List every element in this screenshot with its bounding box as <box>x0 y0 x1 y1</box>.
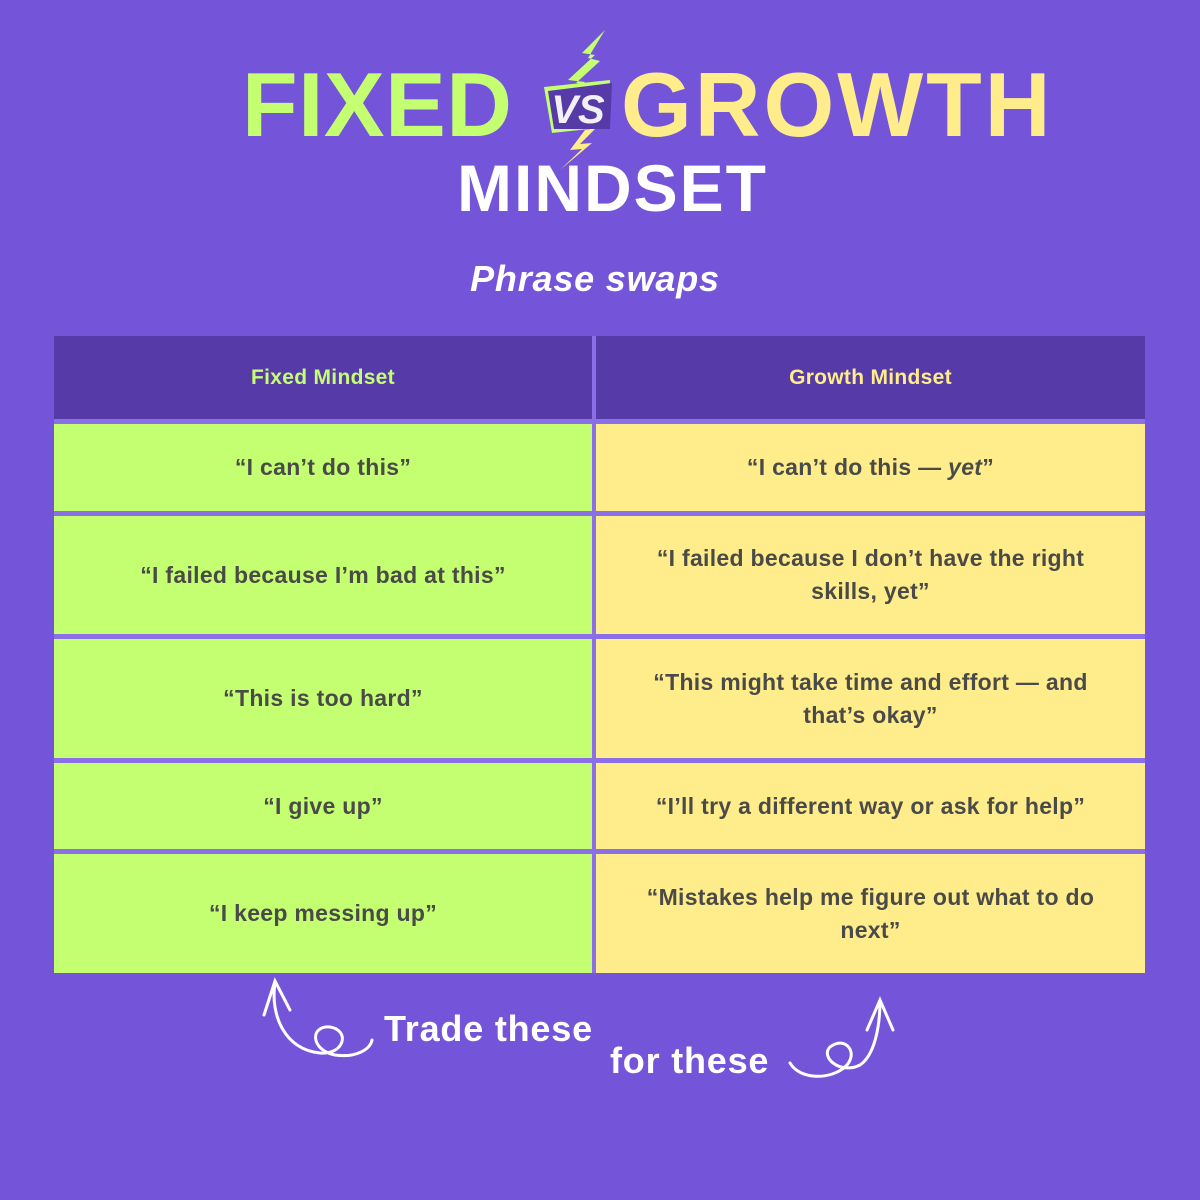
row 1 growth <box>596 424 1145 511</box>
row 1 growth: “I can’t do this — ” <box>747 454 994 480</box>
row 3 fixed <box>54 639 592 758</box>
row 2 growth <box>596 516 1145 634</box>
row 4 growth <box>596 763 1145 849</box>
row 3 growth <box>596 639 1145 758</box>
row 3 growth: that’s okay” <box>803 702 938 728</box>
icon: vs lightning <box>544 30 612 170</box>
row 2 fixed <box>54 516 592 634</box>
row 2 growth: “I failed because I don’t have the right <box>657 545 1084 571</box>
row 1 fixed: “I can’t do this” <box>235 454 411 480</box>
text: for these: for these <box>610 1040 769 1081</box>
row 5 growth: “Mistakes help me figure out what to do <box>647 884 1094 910</box>
table <box>54 336 1145 973</box>
icon: vs lightning: VS <box>551 88 605 132</box>
row 4 fixed <box>54 763 592 849</box>
arrow: right curly <box>788 996 894 1078</box>
row 5 growth <box>596 854 1145 973</box>
title: FIXED: FIXED <box>242 55 512 156</box>
row 5 fixed <box>54 854 592 973</box>
header: Growth Mindset <box>596 336 1145 419</box>
header: Fixed Mindset: Fixed Mindset <box>251 366 395 389</box>
arrow: left curly <box>262 977 374 1058</box>
row 1 growth: yet <box>948 454 982 480</box>
row 4 growth: “I’ll try a different way or ask for help” <box>656 792 1085 818</box>
row 1 fixed <box>54 424 592 511</box>
row 5 growth: next” <box>840 916 901 942</box>
row 4 fixed: “I give up” <box>263 792 383 818</box>
header: Growth Mindset: Growth Mindset <box>789 366 952 389</box>
text: Trade these: Trade these <box>384 1008 593 1049</box>
title: GROWTH: GROWTH <box>621 55 1053 156</box>
row 5 fixed: “I keep messing up” <box>209 900 437 926</box>
row 3 growth: “This might take time and effort — and <box>653 668 1088 694</box>
row 3 fixed: “This is too hard” <box>223 685 423 711</box>
subtitle: Phrase swaps <box>470 258 720 299</box>
header: Fixed Mindset <box>54 336 592 419</box>
title: MINDSET: MINDSET <box>457 151 768 225</box>
row 2 growth: skills, yet” <box>811 578 930 604</box>
row 2 fixed: “I failed because I’m bad at this” <box>140 562 506 588</box>
